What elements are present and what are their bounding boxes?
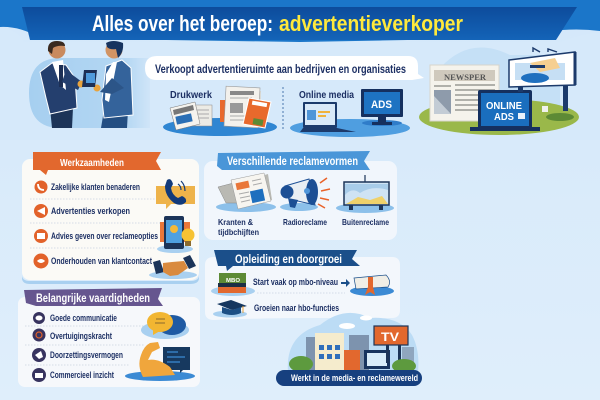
icon: handshake	[149, 255, 197, 279]
caption pill: media and advertising world	[276, 370, 422, 386]
panel: Werkzaamheden	[22, 152, 199, 284]
step: hbo: Groeien naar hbo-functies	[254, 303, 339, 314]
title banner: Alles over het beroep:	[92, 11, 273, 36]
heading ribbon: reclamevormen	[217, 151, 370, 170]
item: Buitenreclame: Buitenreclame	[342, 217, 389, 227]
step: hbo	[213, 300, 339, 318]
skill: communicatie: Goede communicatie	[50, 313, 117, 323]
task: advertenties verkopen: Advertenties verkopen	[51, 206, 130, 217]
task: klantcontact	[34, 254, 153, 268]
skill: doorzettingsvermogen: Doorzettingsvermogen	[50, 350, 123, 360]
caption pill: media and advertising world: Werkt in de media- en reclamewereld	[291, 373, 418, 384]
divider between print and online	[282, 87, 284, 130]
step: mbo: Start vaak op mbo-niveau	[253, 277, 338, 288]
title banner: advertentieverkoper	[279, 11, 463, 36]
heading ribbon: Opleiding: Opleiding en doorgroei	[235, 254, 342, 266]
item: Kranten en tijdschriften: tijdbchijften	[218, 227, 259, 237]
skill: commercieel inzicht: Commercieel inzicht	[50, 370, 114, 380]
print media: Drukwerk	[163, 86, 277, 136]
illustration: media city: TV	[381, 330, 399, 344]
skill: communicatie	[33, 312, 117, 324]
icon: phone	[156, 179, 195, 209]
item: Kranten en tijdschriften	[216, 173, 276, 237]
heading ribbon: Werkzaamheden: Werkzaamheden	[60, 157, 124, 169]
item: Radioreclame	[280, 178, 330, 227]
panel: Belangrijke vaardigheden	[18, 288, 200, 387]
item: Kranten en tijdschriften: Kranten &	[218, 217, 253, 227]
illustration: newspaper, laptop and billboard	[419, 47, 579, 135]
skill: overtuigingskracht: Overtuigingskracht	[50, 331, 112, 341]
panel: Opleiding en doorgroei	[205, 250, 400, 320]
print media: Drukwerk: Drukwerk	[170, 89, 212, 101]
icon: speech bubbles	[141, 312, 189, 339]
heading ribbon: Opleiding	[214, 250, 360, 271]
illustration: media city	[288, 313, 418, 373]
icon: flexed arm and chat	[125, 342, 195, 381]
step: mbo: MBO	[226, 278, 241, 284]
step: mbo	[211, 273, 350, 296]
icon: diploma	[350, 275, 394, 296]
panel: Verschillende reclamevormen	[204, 151, 397, 240]
skill: commercieel inzicht	[32, 368, 114, 382]
panel: hero background	[0, 28, 600, 140]
task: klanten benaderen	[34, 180, 140, 194]
callout: job summary: Verkoopt advertentieruimte aan bedrijven en organisaties	[155, 62, 406, 76]
item: Radioreclame: Radioreclame	[283, 217, 327, 227]
task: advies geven: Advies geven over reclameopties	[51, 231, 158, 242]
icon: tablet and lightbulb	[157, 216, 194, 253]
heading ribbon: Werkzaamheden	[33, 152, 161, 175]
task: klantcontact: Onderhouden van klantcontact	[51, 256, 153, 267]
title banner	[22, 7, 577, 40]
illustration: newspaper, laptop and billboard: ONLINE	[486, 101, 522, 112]
skill: doorzettingsvermogen	[32, 348, 123, 362]
skill: overtuigingskracht	[32, 328, 112, 342]
callout: job summary	[145, 56, 424, 80]
heading ribbon: vaardigheden	[24, 288, 163, 306]
heading ribbon: reclamevormen: Verschillende reclamevormen	[227, 156, 358, 168]
illustration: newspaper, laptop and billboard: ADS	[494, 112, 514, 123]
task: advies geven	[34, 229, 158, 243]
illustration: newspaper, laptop and billboard: NEWSPER	[444, 73, 486, 82]
task: klanten benaderen: Zakelijke klanten benaderen	[51, 182, 140, 193]
task: advertenties verkopen	[34, 204, 130, 218]
illustration: two businessmen with tablet	[40, 41, 133, 128]
heading ribbon: vaardigheden: Belangrijke vaardigheden	[36, 293, 150, 305]
online media	[290, 89, 410, 137]
online media: ADS	[371, 99, 392, 111]
item: Buitenreclame	[336, 175, 394, 227]
online media: Online media	[299, 89, 354, 101]
